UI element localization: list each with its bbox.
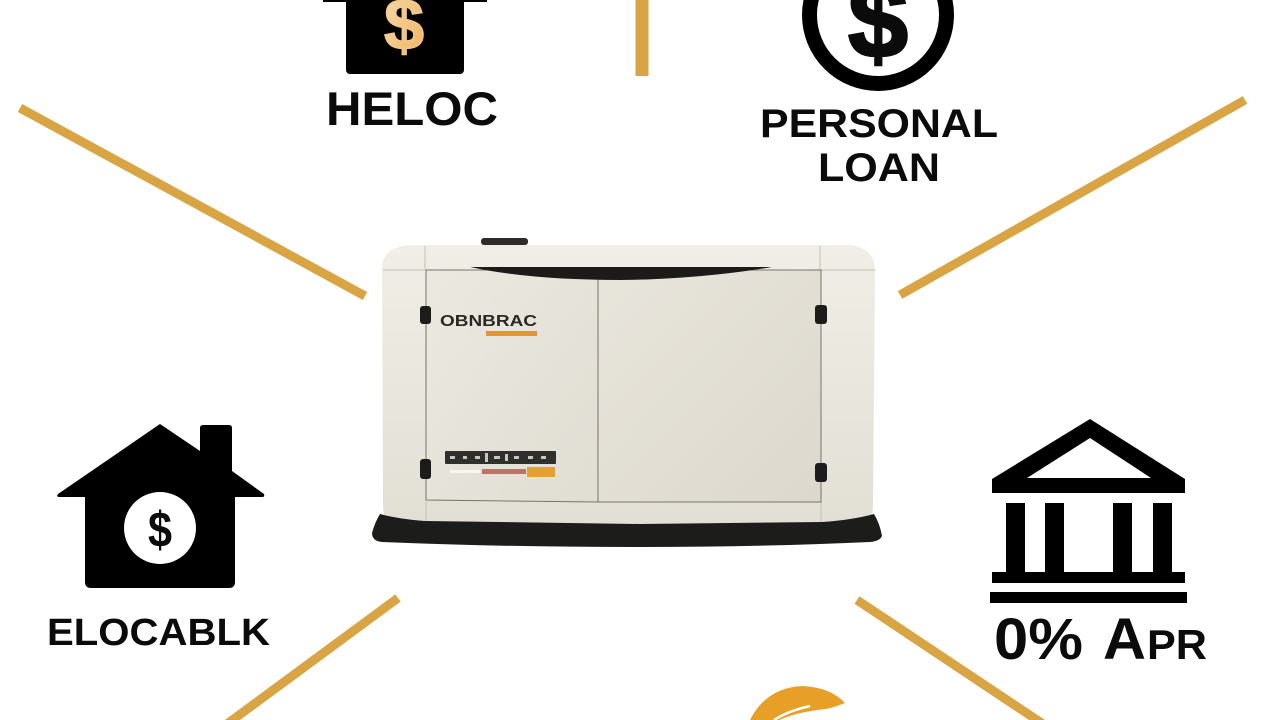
base plinth	[372, 514, 882, 547]
icon: HELOC house with gold dollar	[323, 0, 487, 74]
label: HELOC: HELOC	[326, 82, 498, 135]
door latches	[420, 305, 827, 482]
label: PERSONAL LOAN: PERSONAL	[760, 102, 998, 146]
icon: house with dollar coin	[57, 424, 264, 588]
icon: bank building	[990, 419, 1187, 603]
brand logo: OBNBRAC	[440, 313, 538, 330]
top vent handle	[481, 238, 528, 245]
generator illustration	[372, 238, 882, 547]
connector line: lower right	[857, 600, 1043, 720]
connector line: upper right	[900, 100, 1245, 295]
label: 0% APR: PR	[1147, 621, 1207, 668]
icon: personal loan dollar coin	[810, 0, 946, 84]
dark vent slit	[470, 267, 772, 280]
label: PERSONAL LOAN	[760, 102, 998, 190]
control label	[445, 451, 556, 477]
icon: orange leaf logo	[749, 686, 845, 720]
label: PERSONAL LOAN: LOAN	[818, 146, 940, 190]
label: 0% APR: A	[1103, 607, 1146, 672]
connector line: top centre	[636, 0, 648, 76]
label: 0% APR: 0%	[994, 607, 1083, 672]
label: ELOCABLK: ELOCABLK	[47, 612, 271, 654]
brand logo	[440, 313, 538, 336]
door panels	[426, 270, 598, 502]
generator housing	[382, 245, 875, 526]
lid seam	[383, 246, 875, 522]
label: 0% APR	[994, 607, 1207, 672]
connector line: lower left	[227, 598, 398, 720]
connector line: upper left	[20, 108, 365, 296]
icon: house with dollar coin: $	[148, 502, 172, 558]
